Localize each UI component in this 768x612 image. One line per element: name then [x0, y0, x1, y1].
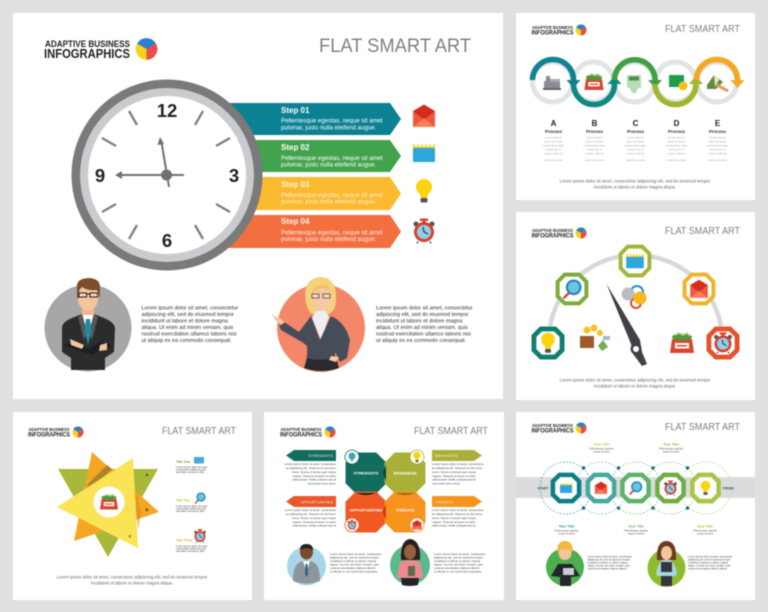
label: finish: FINISH — [723, 486, 734, 490]
process B: Process — [586, 129, 604, 134]
text: weakness: Lorem ipsum dolor sit amet, consectetur — [432, 462, 483, 466]
text: man: Lorem ipsum dolor sit amet, consectetur — [330, 552, 381, 556]
text: strengths: ullamcorper. Nulla a aliquet sed at — [292, 478, 336, 482]
process E: dolor sit amet, — [708, 140, 727, 144]
person: woman — [390, 539, 430, 586]
process D: Lorem ipsum — [668, 136, 685, 140]
process A — [542, 119, 565, 162]
text: businessman: nostrud exercitation ullamco laboris nisi — [142, 332, 236, 338]
person: businesswoman — [271, 277, 365, 372]
text: blonde woman: aliqua. Ut enim ad minim veniam, quis — [588, 564, 630, 568]
process A: maximus porta. — [544, 158, 564, 162]
octagon: calendar — [553, 475, 579, 501]
icon: calendar — [413, 144, 435, 162]
grey band — [516, 477, 755, 498]
process C — [624, 119, 647, 162]
clock: 12 — [157, 100, 177, 121]
text: man: aliqua. Ut enim ad minim veniam, quis — [330, 562, 379, 566]
item one: Lorem ipsum dolor sit amet, — [176, 465, 208, 469]
panel: timeline — [516, 412, 755, 600]
text: threats: ullamcorper. Nulla a aliquet sed at — [432, 524, 476, 528]
logo: ADAPTIVE BUSINESS — [532, 25, 574, 31]
step 04 text: pulvinar, justo nulla eleifend augue. — [281, 236, 377, 243]
icon badge: bulb — [410, 450, 424, 464]
item two — [176, 493, 208, 513]
bottom titles: Pellentesque egestas — [555, 530, 579, 532]
panel: process chain — [516, 13, 755, 200]
step 03 text: Pellentesque egestas, neque sit amet — [281, 192, 383, 199]
text: threats: Lorem ipsum dolor sit amet, consectetur — [432, 508, 483, 512]
step 01 text: pulvinar, justo nulla eleifend augue. — [281, 124, 377, 132]
text: opportunities: Lorem ipsum dolor sit amet, consectetur — [285, 508, 336, 512]
process E: maximus porta. — [708, 158, 728, 162]
process E: Process — [709, 129, 727, 134]
footer text: Lorem ipsum dolor sit amet, consectetur adipiscing elit, sed do eiusmod tempor — [57, 574, 208, 580]
item one — [176, 457, 208, 474]
person: man — [287, 544, 326, 586]
text: businesswoman: nostrud exercitation ullamco laboris nisi — [376, 332, 471, 338]
banner: opportunities — [286, 496, 336, 507]
item one: consectetur adipiscing elit, — [176, 468, 207, 472]
logo — [532, 422, 587, 434]
bottom titles: Pellentesque egestas — [624, 530, 649, 532]
step 01 text: Pellentesque egestas, neque sit amet — [281, 118, 383, 124]
process D: consectetur adip- — [665, 144, 688, 148]
top titles — [590, 442, 684, 454]
logo — [532, 227, 587, 240]
item three: Title Three — [176, 538, 193, 542]
item three — [176, 529, 208, 553]
icon: mail — [413, 104, 435, 127]
step 02 text: Pellentesque egestas, neque sit amet — [281, 155, 383, 162]
connector dots — [582, 466, 689, 510]
process A: iscing elit, in — [546, 148, 562, 152]
text: brunette woman: Lorem ipsum dolor sit amet, consectetur — [688, 556, 733, 558]
process A: consectetur adip- — [542, 144, 565, 148]
item three: Lorem ipsum dolor sit amet, — [176, 544, 208, 548]
text: businessman: ut aliquip ex ea commodo consequat. — [142, 338, 232, 344]
text: man: adipiscing elit, sed do eiusmod tempor — [330, 556, 379, 560]
step 04 text: Step 04 — [281, 217, 310, 226]
icon badge: mail — [410, 518, 424, 532]
item one: sed diam nonummy nibh — [176, 470, 205, 474]
text: opportunities: lorem. Donec ut lectus eget neque — [292, 516, 336, 520]
icon: banknote — [669, 75, 688, 90]
process C: consectetur adip- — [624, 144, 647, 148]
process B: Lorem ipsum — [586, 136, 603, 140]
text: businessman: Lorem ipsum dolor sit amet, consectetur — [142, 306, 238, 312]
footer text: Lorem ipsum dolor sit amet, consectetur adipiscing elit, sed do eiusmod tempor — [560, 178, 711, 184]
text: businessman: adipiscing elit, sed do eiusmod tempor — [142, 312, 234, 318]
panel: gauge — [516, 212, 755, 400]
process C: luctus, felis at — [627, 152, 644, 156]
title: FLAT SMART ART — [319, 35, 471, 57]
icon: wallet and coins — [580, 324, 610, 351]
footer text: incididunt ut labore et dolore magna aliqua. — [594, 184, 676, 190]
process E: luctus, felis at — [709, 152, 726, 156]
icon: alarm — [414, 218, 434, 244]
top titles: neque sit amet — [663, 450, 680, 454]
octagon: calendar — [621, 247, 649, 275]
process B: consectetur adip- — [583, 144, 606, 148]
clock: 6 — [162, 230, 172, 251]
text: weakness: ac adipiscing elit. Vivamus at nisi lorem — [432, 466, 483, 470]
logo: INFOGRAPHICS — [532, 30, 574, 36]
icon: atm — [627, 75, 641, 93]
octagon: mail — [588, 475, 614, 501]
octagon: bulb — [692, 475, 719, 501]
panel: star triangles — [13, 412, 252, 600]
icon: cash bag — [670, 333, 694, 353]
process A: A — [551, 119, 557, 128]
step 02 text: Step 02 — [281, 143, 310, 152]
process D: iscing elit, in — [669, 148, 685, 152]
bottom titles: Pellentesque egestas — [693, 530, 718, 532]
text: blonde woman: Lorem ipsum dolor sit amet, consectetur — [588, 556, 632, 558]
text: businessman: aliqua. Ut enim ad minim veniam, quis — [142, 325, 234, 331]
bottom titles: Your Title — [697, 524, 713, 528]
process D: Process — [668, 129, 686, 134]
item two: consectetur adipiscing elit, — [176, 506, 207, 510]
text: strengths: ac adipiscing elit. Vivamus at nisi lorem — [286, 466, 337, 470]
text: opportunities: magna. Vivamus at ipsum et dolor — [292, 520, 336, 524]
person: blonde woman — [546, 541, 584, 586]
octagon: search — [622, 475, 649, 501]
text: strengths: commodo lorem dolor. — [307, 481, 336, 485]
text: woman: adipiscing elit, sed do eiusmod tempor — [434, 556, 483, 560]
banner: weakness: WEAKNESS — [435, 453, 458, 458]
icon: cash register — [543, 76, 561, 90]
icon: cash bag — [584, 74, 604, 90]
text: man: ut aliquip ex ea commodo consequat. — [330, 570, 378, 574]
banner: weakness — [432, 450, 482, 461]
logo: ADAPTIVE BUSINESS — [28, 427, 70, 433]
item one: Title One — [176, 460, 190, 464]
item two: Title Two — [176, 498, 190, 502]
text: strengths: lorem. Donec ut lectus eget neque — [292, 470, 336, 474]
panel: SWOT — [264, 412, 504, 600]
process D: dolor sit amet, — [667, 140, 686, 144]
bottom titles: Your Title — [628, 524, 644, 528]
text: businesswoman: incididunt ut labore et dolore magna — [376, 318, 463, 324]
text: strengths: magna. Vivamus at ipsum et dolor — [292, 474, 336, 478]
SWOT octagons: OPPORTUNITIES — [350, 508, 383, 512]
star diagram: C — [128, 534, 132, 538]
text: woman: aliqua. Ut enim ad minim veniam, quis — [434, 562, 483, 566]
text: woman: Lorem ipsum dolor sit amet, consectetur — [434, 552, 485, 556]
person: brunette woman — [648, 541, 686, 587]
clock: 9 — [95, 165, 105, 186]
bottom titles: neque sit amet — [697, 532, 714, 536]
top titles: Your Title — [594, 442, 609, 446]
octagon: alarm — [657, 475, 684, 501]
text: threats: ac adipiscing elit. Vivamus at nisi lorem — [432, 512, 483, 516]
text: man: nostrud exercitation ullamco laboris — [330, 566, 376, 570]
bottom titles: neque sit amet — [558, 532, 575, 536]
top titles: Pellentesque egestas — [590, 448, 614, 450]
text: woman: ut aliquip ex ea commodo consequat. — [434, 570, 482, 574]
top titles: neque sit amet — [593, 450, 610, 454]
process A: Process — [545, 129, 563, 134]
title: FLAT SMART ART — [414, 426, 488, 437]
logo: INFOGRAPHICS — [44, 46, 130, 61]
footer text: Lorem ipsum dolor sit amet, consectetur adipiscing elit, sed do eiusmod tempor — [560, 378, 711, 382]
process D: D — [674, 119, 680, 128]
bottom titles: neque sit amet — [628, 532, 645, 536]
item three: consectetur adipiscing elit, — [176, 546, 207, 550]
logo: ADAPTIVE BUSINESS — [532, 423, 574, 429]
text: threats: magna. Vivamus at ipsum et dolor — [432, 520, 476, 524]
dashed circles — [540, 462, 732, 514]
process D — [665, 119, 688, 162]
octagon: bulb — [534, 329, 562, 357]
text: threats: lorem. Donec ut lectus eget neque — [432, 516, 476, 520]
process E: E — [715, 119, 721, 128]
process B: dolor sit amet, — [585, 140, 604, 144]
text: weakness: lorem. Donec ut lectus eget neque — [432, 470, 476, 474]
icon badge: pin — [345, 450, 359, 464]
text: businessman: incididunt ut labore et dolore magna — [142, 318, 229, 324]
logo: INFOGRAPHICS — [280, 432, 323, 438]
icon badge: alarm — [345, 518, 359, 532]
logo — [532, 24, 587, 36]
process E: iscing elit, in — [710, 148, 726, 152]
text: brunette woman: adipiscing elit, sed do eiusmod tempor — [688, 558, 731, 562]
logo: ADAPTIVE BUSINESS — [532, 228, 574, 234]
logo: INFOGRAPHICS — [28, 432, 71, 438]
SWOT octagons: WEAKNESS — [393, 470, 417, 476]
process A: dolor sit amet, — [544, 140, 563, 144]
process C: maximus porta. — [626, 158, 646, 162]
step 03 text: Step 03 — [281, 180, 310, 189]
banner: opportunities: OPPORTUNITIES — [300, 500, 333, 504]
arrow banners — [225, 103, 401, 248]
SWOT octagons: STRENGHTS — [354, 470, 379, 476]
banner: strengths — [286, 450, 336, 461]
icon: money hand — [707, 75, 728, 91]
text: businesswoman: Lorem ipsum dolor sit amet, consectetur — [376, 306, 473, 312]
title: FLAT SMART ART — [665, 422, 740, 433]
text: blonde woman: adipiscing elit, sed do eiusmod tempor — [588, 558, 630, 562]
item two: sed diam nonummy nibh — [176, 509, 205, 513]
logo — [280, 426, 336, 438]
person: businessman — [44, 278, 132, 372]
title: FLAT SMART ART — [665, 24, 740, 35]
text: man: incididunt ut labore et dolore magna — [330, 559, 376, 563]
octagon: alarm — [709, 329, 737, 357]
process B — [583, 119, 606, 162]
step 04 text: Pellentesque egestas, neque sit amet — [281, 230, 383, 236]
coloured arc arrows — [532, 59, 744, 104]
banner: threats — [432, 496, 482, 507]
logo: INFOGRAPHICS — [532, 428, 574, 434]
star diagram: A — [146, 473, 148, 477]
text: blonde woman: nostrud exercitation ullamco laboris — [588, 568, 627, 570]
panel: clock steps — [13, 13, 503, 399]
octagon: search — [558, 275, 586, 303]
label: start: START — [538, 486, 548, 490]
text: brunette woman: nostrud exercitation ullamco laboris — [688, 568, 728, 570]
process E: Lorem ipsum — [709, 136, 726, 140]
step 01 text: Step 01 — [281, 106, 310, 115]
process A: Lorem ipsum — [545, 136, 562, 140]
bottom titles: Your Title — [559, 524, 574, 528]
banner: strengths: STRENGHTS — [308, 453, 333, 458]
logo — [44, 38, 157, 61]
star diagram — [57, 452, 159, 557]
process C: C — [633, 119, 639, 128]
gauge arc — [550, 255, 721, 326]
item two: Lorem ipsum dolor sit amet, — [176, 504, 208, 508]
text: woman: incididunt ut labore et dolore magna — [434, 559, 480, 563]
footer text: incididunt ut labore et dolore magna aliqua. — [594, 384, 676, 388]
bottom titles — [555, 524, 718, 536]
text: strengths: Lorem ipsum dolor sit amet, consectetur — [285, 462, 336, 466]
text: businesswoman: adipiscing elit, sed do eiusmod tempor — [376, 312, 469, 318]
text: businesswoman: ut aliquip ex ea commodo consequat. — [376, 338, 467, 344]
logo: INFOGRAPHICS — [532, 232, 574, 240]
clock — [72, 80, 262, 270]
process C: iscing elit, in — [628, 148, 644, 152]
text: opportunities: ullamcorper. Nulla a aliquet sed at — [292, 524, 336, 528]
footer text: incididunt ut labore et dolore magna aliqua. — [91, 580, 173, 586]
top titles: Your Title — [663, 442, 679, 446]
SWOT octagons: THREATS — [396, 508, 415, 512]
process C: dolor sit amet, — [626, 140, 645, 144]
text: weakness: ullamcorper. Nulla a aliquet sed at — [432, 478, 476, 482]
process C: Lorem ipsum — [627, 136, 644, 140]
star diagram: B — [146, 508, 148, 512]
logo: ADAPTIVE BUSINESS — [280, 427, 322, 433]
text: weakness: commodo lorem dolor. — [432, 481, 461, 485]
clock: 3 — [229, 165, 239, 186]
process B: B — [592, 119, 598, 128]
process C: Process — [627, 129, 645, 134]
process A: luctus, felis at — [545, 152, 562, 156]
step 02 text: pulvinar, justo nulla eleifend augue. — [281, 162, 377, 168]
text: brunette woman: incididunt ut labore et dolore magna — [688, 562, 728, 564]
process D: maximus porta. — [667, 158, 687, 162]
SWOT octagons — [346, 453, 425, 532]
text: woman: nostrud exercitation ullamco laboris — [434, 566, 480, 570]
step 03 text: pulvinar, justo nulla eleifend augue. — [281, 198, 377, 206]
octagon: mail — [685, 275, 713, 303]
process B: maximus porta. — [585, 158, 605, 162]
text: opportunities: ac adipiscing elit. Vivamus at nisi lorem — [286, 512, 337, 516]
grey rings — [532, 62, 737, 102]
text: blonde woman: incididunt ut labore et dolore magna — [588, 562, 628, 564]
process B: luctus, felis at — [586, 152, 603, 156]
process B: iscing elit, in — [587, 148, 603, 152]
logo: ADAPTIVE BUSINESS — [45, 39, 130, 49]
text: businesswoman: aliqua. Ut enim ad minim veniam, quis — [376, 325, 468, 331]
title: FLAT SMART ART — [162, 426, 236, 437]
item three: sed diam nonummy nibh — [176, 549, 205, 553]
banner: threats: THREATS — [435, 500, 454, 504]
text: weakness: magna. Vivamus at ipsum et dolor — [432, 474, 476, 478]
process D: luctus, felis at — [668, 152, 685, 156]
top titles: Pellentesque egestas — [659, 448, 684, 450]
logo — [28, 426, 84, 438]
process E: consectetur adip- — [706, 144, 729, 148]
process E — [706, 119, 729, 162]
title: FLAT SMART ART — [665, 226, 740, 237]
text: brunette woman: aliqua. Ut enim ad minim veniam, quis — [688, 564, 731, 568]
icon: coins — [622, 286, 646, 308]
icon: bulb — [416, 179, 432, 202]
gauge needle — [606, 284, 647, 366]
